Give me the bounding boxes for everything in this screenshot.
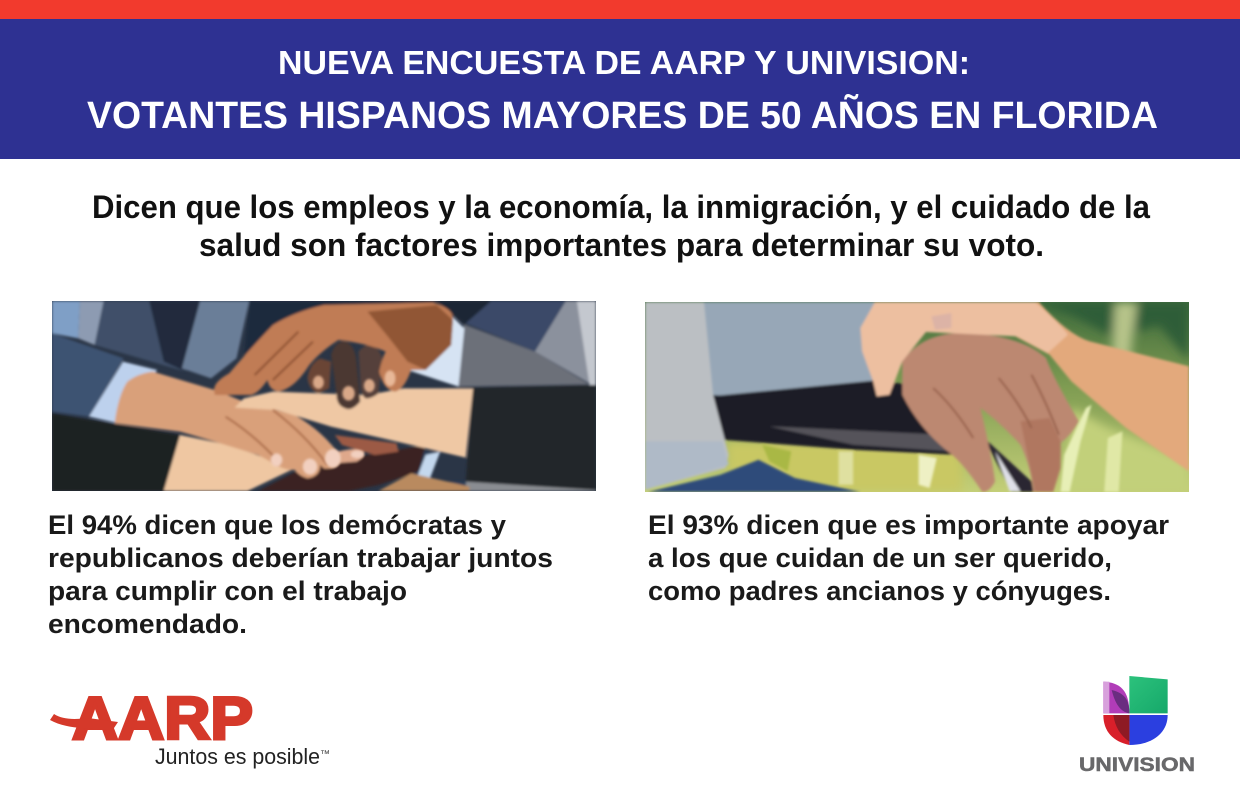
- jeans: [648, 460, 860, 492]
- red top band: [0, 0, 1240, 19]
- photo: stacked hands: [52, 301, 596, 491]
- Univision logo: [1079, 676, 1195, 776]
- hand detail: [226, 332, 327, 465]
- subheading: salud son factores importantes para determinar su voto.: [199, 227, 1044, 263]
- top hand: [214, 302, 453, 395]
- right statistic text: [648, 510, 1170, 606]
- right statistic text: El 93% dicen que es importante apoyar: [648, 510, 1170, 540]
- older hand: [902, 333, 1079, 492]
- Univision logo: UNIVISION: [1079, 755, 1195, 776]
- subheading: Dicen que los empleos y la economía, la inmigración, y el cuidado de la: [92, 189, 1150, 225]
- title banner: NUEVA ENCUESTA DE AARP Y UNIVISION:: [278, 44, 970, 81]
- left statistic text: republicanos deberían trabajar juntos: [48, 543, 553, 573]
- forearm of caregiver: [999, 302, 1189, 471]
- right statistic text: a los que cuidan de un ser querido,: [648, 543, 1112, 573]
- left statistic text: [48, 510, 553, 639]
- lower dark hand: [258, 445, 426, 491]
- title banner: VOTANTES HISPANOS MAYORES DE 50 AÑOS EN FLORIDA: [87, 93, 1158, 137]
- right statistic text: como padres ancianos y cónyuges.: [648, 576, 1111, 606]
- AARP logo: ™: [320, 749, 330, 760]
- title banner: [0, 19, 1240, 159]
- armrest: [708, 380, 955, 455]
- left arm and hand: [115, 372, 342, 478]
- grey sweater: [645, 302, 729, 490]
- caregiver hand: [860, 302, 1068, 396]
- AARP logo: [50, 685, 330, 769]
- AARP logo: Juntos es posible: [155, 744, 320, 769]
- AARP logo: AARP: [72, 685, 253, 752]
- left statistic text: El 94% dicen que los demócratas y: [48, 510, 506, 540]
- sleeve: [700, 302, 890, 395]
- fingers under the left hand: [331, 449, 364, 463]
- dark fingers: [307, 358, 331, 393]
- lower arm: [164, 435, 295, 491]
- left statistic text: para cumplir con el trabajo: [48, 576, 407, 606]
- subheading: [92, 189, 1150, 263]
- right arm: [235, 388, 473, 458]
- photo: caregiver holding hand on wheelchair: [645, 302, 1189, 492]
- left statistic text: encomendado.: [48, 609, 247, 639]
